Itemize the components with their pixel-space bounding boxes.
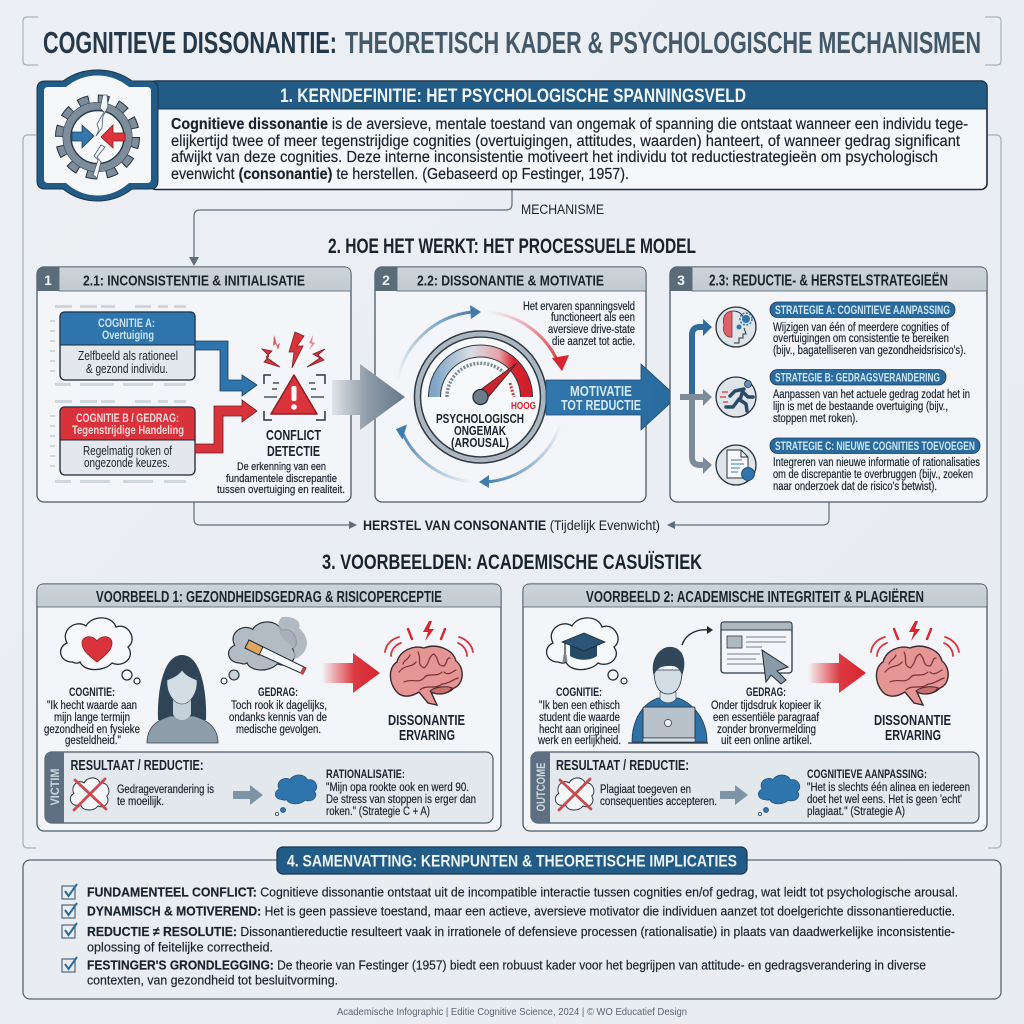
text: behaviour too hard: te moeilijk. [117, 796, 164, 808]
strategy A: (bijv., bagatelliseren van gezondheidsrisico's). [773, 345, 966, 357]
arrow: curved to browser [682, 626, 713, 645]
text: cognitieve aanpassing: COGNITIEVE AANPASSING: [807, 769, 927, 781]
text: cognitieve aanpassing: "Het is slechts één alinea en iedereen [807, 782, 970, 794]
panel: 2.2 dissonantie [375, 267, 646, 502]
badge 3 [670, 267, 692, 291]
text: gedrag 2: Onder tijdsdruk kopieer ik [711, 700, 821, 712]
icon: cognitive adjustment head [716, 307, 756, 347]
label: dissonantie 1: ERVARING [399, 727, 455, 744]
strategy B: Aanpassen van het actuele gedrag zodat het in [773, 389, 970, 401]
text: gedrag 1: GEDRAG: [258, 687, 298, 699]
strategy A: STRATEGIE A: COGNITIEVE AANPASSING [775, 305, 950, 317]
heading voorbeeld 2: VOORBEELD 2: ACADEMISCHE INTEGRITEIT & PLAGIËREN [586, 589, 924, 606]
text: cognitie 1: mijn lange termijn [54, 712, 130, 724]
box: cognitie B: COGNITIE B / GEDRAG: [76, 413, 179, 425]
person: woman [147, 655, 218, 743]
text: cognitieve aanpassing: plagiaat." (Strategie A) [807, 806, 905, 818]
gauge: psychologisch ongemak: (AROUSAL) [451, 435, 509, 450]
cycle arrows [396, 305, 569, 488]
arrow: blue to conflict [195, 341, 257, 396]
gauge: psychologisch ongemak [414, 331, 546, 463]
heading: conflict detectie: CONFLICT [266, 427, 321, 444]
arrow: red 1 [322, 653, 380, 693]
summary list: contexten, van gezondheid tot besluitvorming. [87, 972, 338, 988]
heading: conflict detectie: DETECTIE [267, 443, 320, 460]
side brackets [23, 135, 1001, 848]
badge 1 [37, 267, 59, 291]
definition body [150, 81, 987, 190]
text: cognitie 1: "Ik hecht waarde aan [47, 700, 137, 712]
icon: runner [716, 377, 756, 417]
heading: resultaat 2: RESULTAAT / REDUCTIE: [556, 758, 689, 774]
header 2.2 [397, 267, 646, 291]
heading: section 2: 2. HOE HET WERKT: HET PROCESSUELE MODEL [328, 234, 696, 258]
heading pill: section 4: 4. SAMENVATTING: KERNPUNTEN & THEORETISCHE IMPLICATIES [287, 852, 737, 870]
icon: document [716, 445, 756, 485]
arrow: motivatie tot reductie [546, 364, 677, 430]
strategy B: lijn is met de bestaande overtuiging (bijv., [773, 401, 948, 413]
thought cloud: graduation cap [547, 618, 627, 684]
text: rationalisatie [326, 769, 476, 818]
box: cognitie A: Zelfbeeld als rationeel [78, 349, 178, 363]
thought cloud: heart [61, 618, 140, 684]
heading pill: section 4 [277, 847, 747, 874]
badge 2 [375, 267, 397, 291]
heading voorbeeld 1: VOORBEELD 1: GEZONDHEIDSGEDRAG & RISICOPERCEPTIE [96, 589, 442, 606]
icon: crossed out cloud 2 [555, 778, 594, 810]
text: conflict explanation: De erkenning van een [237, 461, 326, 473]
text: drive-state: die aanzet tot actie. [552, 336, 635, 348]
text: admit plagiarism [600, 784, 717, 808]
icon: browser with cursor [721, 622, 792, 684]
text: gedrag 1: Toch rook ik dagelijks, [231, 700, 327, 712]
strategy C: Integreren van nieuwe informatie of rationalisaties [773, 457, 980, 469]
icon: blue cloud 1 [275, 775, 317, 816]
side tab: victim [45, 752, 64, 823]
gauge: psychologisch ongemak: PSYCHOLOGISCH [436, 411, 524, 426]
text: rationalisatie: roken." (Strategie C + A) [326, 806, 430, 818]
icon: blue cloud 2 [758, 775, 800, 816]
connector: herstel van consonantie: HERSTEL VAN CONSONANTIE (Tijdelijk Evenwicht) [363, 517, 660, 533]
summary list: oplossing of feitelijke correctheid. [87, 940, 273, 954]
text: drive-state: aversieve drive-state [548, 324, 635, 336]
strategy A [770, 302, 966, 357]
badge 1: 1 [44, 272, 52, 288]
summary list: FUNDAMENTEEL CONFLICT: Cognitieve dissonantie ontstaat uit de incompatible interactie tussen cognities en/of gedrag, wat leidt tot psychologische arousal. [87, 884, 958, 900]
branching arrows [680, 319, 712, 474]
heading 2.1: 2.1: INCONSISTENTIE & INITIALISATIE [83, 272, 305, 290]
text: rationalisatie: De stress van stoppen is erger dan [326, 794, 476, 806]
strategy B: stoppen met roken). [773, 413, 858, 425]
summary list: REDUCTIE ≠ RESOLUTIE: Dissonantiereductie resulteert vaak in irrationele of defensieve processen (rationalisatie) in plaats van daadwerkelijke inconsistentie- [87, 924, 955, 939]
arrow: grey flow from 2.1 to 2.2 [332, 364, 405, 430]
label: dissonantie 2 [874, 712, 951, 744]
text: behaviour too hard [117, 784, 214, 808]
footer: Academische Infographic | Editie Cognitive Science, 2024 | © WO Educatief Design [337, 1006, 687, 1018]
arrow: grey small 1 [233, 785, 263, 805]
text: gedrag 2: een essentiële paragraaf [713, 712, 820, 724]
panel: 2.3 reductie [670, 267, 987, 502]
heading: resultaat 1: RESULTAAT / REDUCTIE: [70, 758, 204, 774]
side tab: victim: VICTIM [48, 768, 62, 806]
badge 2: 2 [382, 272, 390, 288]
text: gedrag 1: medische gevolgen. [236, 724, 321, 736]
checkbox icons [62, 884, 77, 972]
text: gedrag 1: ondanks kennis van de [229, 712, 327, 724]
badge 3: 3 [677, 272, 685, 288]
text: drive-state: Het ervaren spanningsveld [523, 301, 635, 313]
strategy A: Wijzigen van één of meerdere cognities of [773, 322, 950, 334]
box: cognitie B: ongezonde keuzes. [84, 456, 170, 470]
text: gedrag 2 [711, 687, 821, 747]
definition heading: 1. KERNDEFINITIE: HET PSYCHOLOGISCHE SPANNINGSVELD [280, 85, 746, 107]
strategy A: overtuigingen om consistentie te bereiken [773, 333, 949, 345]
connector: herstel van consonantie [194, 502, 829, 533]
thought cloud: cigarette [221, 617, 307, 684]
arrow: grey small 2 [720, 785, 748, 805]
header voorbeeld 1 [37, 584, 501, 607]
text: cognitieve aanpassing [807, 769, 970, 818]
box: cognitie B [60, 407, 195, 475]
strategy C: naar onderzoek dat de risico's betwist). [773, 481, 937, 493]
definition text [171, 116, 968, 183]
text: admit plagiarism: Plagiaat toegeven en [600, 784, 691, 796]
text: rationalisatie: RATIONALISATIE: [326, 769, 405, 781]
summary list: DYNAMISCH & MOTIVEREND: Het is geen passieve toestand, maar een actieve, aversieve motivator die individuen aanzet tot doelgerichte dissonantiereductie. [87, 904, 955, 918]
text: drive-state [523, 301, 635, 348]
panel: voorbeeld 2 [523, 584, 987, 831]
text: drive-state: functioneert als een [551, 312, 635, 324]
connector: mechanisme [189, 190, 604, 266]
header voorbeeld 2 [523, 584, 987, 607]
person: student with laptop [628, 647, 708, 743]
icon: brain 2 [871, 621, 959, 705]
icon: brain 1 [385, 621, 473, 705]
gauge: psychologisch ongemak: ONGEMAK [454, 423, 506, 438]
arrow: motivatie tot reductie: MOTIVATIE [570, 384, 632, 400]
text: cognitieve aanpassing: doet het wel eens. Het is geen 'echt' [807, 794, 962, 806]
gauge: psychologisch ongemak: HOOG [511, 401, 536, 412]
panel: core definition [150, 81, 987, 190]
arrow: red to conflict [195, 400, 257, 453]
panel: samenvatting [23, 847, 1001, 999]
text: cognitie 1 [44, 687, 140, 747]
label: dissonantie 1 [388, 712, 465, 744]
box: cognitie A: & gezond individu. [86, 362, 168, 376]
text: conflict explanation [217, 461, 345, 496]
heading 2.2: 2.2: DISSONANTIE & MOTIVATIE [417, 272, 604, 290]
strategy C: om de discrepantie te overbruggen (bijv., zoeken [773, 469, 973, 481]
text: cognitie 2: hecht aan origineel [539, 724, 620, 736]
definition text: evenwicht (consonantie) te herstellen. (Gebaseerd op Festinger, 1957). [171, 166, 629, 183]
text: conflict explanation: tussen overtuiging en realiteit. [217, 484, 345, 496]
header 2.3 [692, 267, 987, 291]
text: cognitie 2: student die waarde [539, 712, 620, 724]
icon: crossed out cloud 1 [70, 778, 109, 810]
header 2.1 [59, 267, 351, 291]
icon: conflict alert [262, 332, 325, 420]
box: cognitie A [60, 312, 195, 380]
result box 2 [531, 752, 979, 823]
label: dissonantie 2: DISSONANTIE [874, 712, 951, 729]
connector: mechanisme: MECHANISME [521, 202, 604, 217]
decorative dashes [50, 305, 186, 483]
summary list [87, 884, 958, 988]
heading: section 3: 3. VOORBEELDEN: ACADEMISCHE CASUÏSTIEK [322, 551, 702, 574]
definition text: Cognitieve dissonantie is de aversieve, mentale toestand van ongemak of spanning die ontstaat wanneer een individu tege- [171, 116, 968, 133]
box: cognitie B: Regelmatig roken of [83, 444, 172, 458]
text: cognitie 2: werk en eerlijkheid. [537, 735, 621, 747]
definition text: afwijkt van deze cognities. Deze interne inconsistentie motiveert het individu tot reductiestrategieën om psychologisch [171, 149, 938, 166]
box: cognitie A: COGNITIE A: [98, 316, 155, 330]
text: cognitie 1: gesteldheid." [65, 735, 121, 747]
side tab: outcome: OUTCOME [534, 762, 548, 812]
text: conflict explanation: fundamentele discrepantie [226, 473, 337, 485]
strategy B: STRATEGIE B: GEDRAGSVERANDERING [775, 372, 940, 384]
box: cognitie A: Overtuiging [102, 328, 154, 342]
text: behaviour too hard: Gedrageverandering is [117, 784, 214, 796]
panel: 2.1 inconsistentie [37, 267, 351, 502]
strategy C [770, 438, 980, 493]
definition header bar [150, 81, 987, 109]
heading 2.3: 2.3: REDUCTIE- & HERSTELSTRATEGIEËN [709, 272, 948, 290]
text: cognitie 2 [537, 687, 621, 747]
strategy B [770, 370, 970, 425]
text: cognitie 2: "Ik ben een ethisch [539, 700, 620, 712]
label: dissonantie 2: ERVARING [885, 727, 941, 744]
summary list: FESTINGER'S GRONDLEGGING: De theorie van Festinger (1957) biedt een robuust kader voor het begrijpen van attitude- en gedragsverandering in diverse [87, 958, 926, 972]
title: COGNITIEVE DISSONANTIE: [43, 25, 337, 60]
text: gedrag 2: GEDRAG: [746, 687, 786, 699]
text: admit plagiarism: consequenties accepteren. [600, 796, 717, 808]
panel: voorbeeld 1 [37, 584, 501, 831]
text: gedrag 2: uit een online artikel. [721, 735, 812, 747]
text: gedrag 1 [229, 687, 327, 736]
text: cognitie 1: COGNITIE: [69, 687, 115, 699]
side tab: outcome [531, 752, 550, 823]
arrow: red 2 [808, 653, 866, 693]
icon: cracked gear with opposing arrows [37, 70, 158, 201]
arrow: motivatie tot reductie: TOT REDUCTIE [561, 398, 641, 414]
text: gedrag 2: zonder bronvermelding [717, 724, 816, 736]
definition text: elijkertijd twee of meer tegenstrijdige cognities (overtuigingen, attitudes, waarden) hanteert, of wanneer gedrag significant [171, 133, 961, 150]
title [23, 17, 1001, 65]
result box 1 [45, 752, 493, 823]
heading: conflict detectie [266, 427, 321, 460]
text: rationalisatie: "Mijn opa rookte ook en werd 90. [326, 782, 469, 794]
text: cognitie 1: gezondheid en fysieke [44, 724, 140, 736]
text: cognitie 2: COGNITIE: [556, 687, 602, 699]
label: dissonantie 1: DISSONANTIE [388, 712, 465, 729]
box: cognitie B: Tegenstrijdige Handeling [72, 425, 184, 437]
